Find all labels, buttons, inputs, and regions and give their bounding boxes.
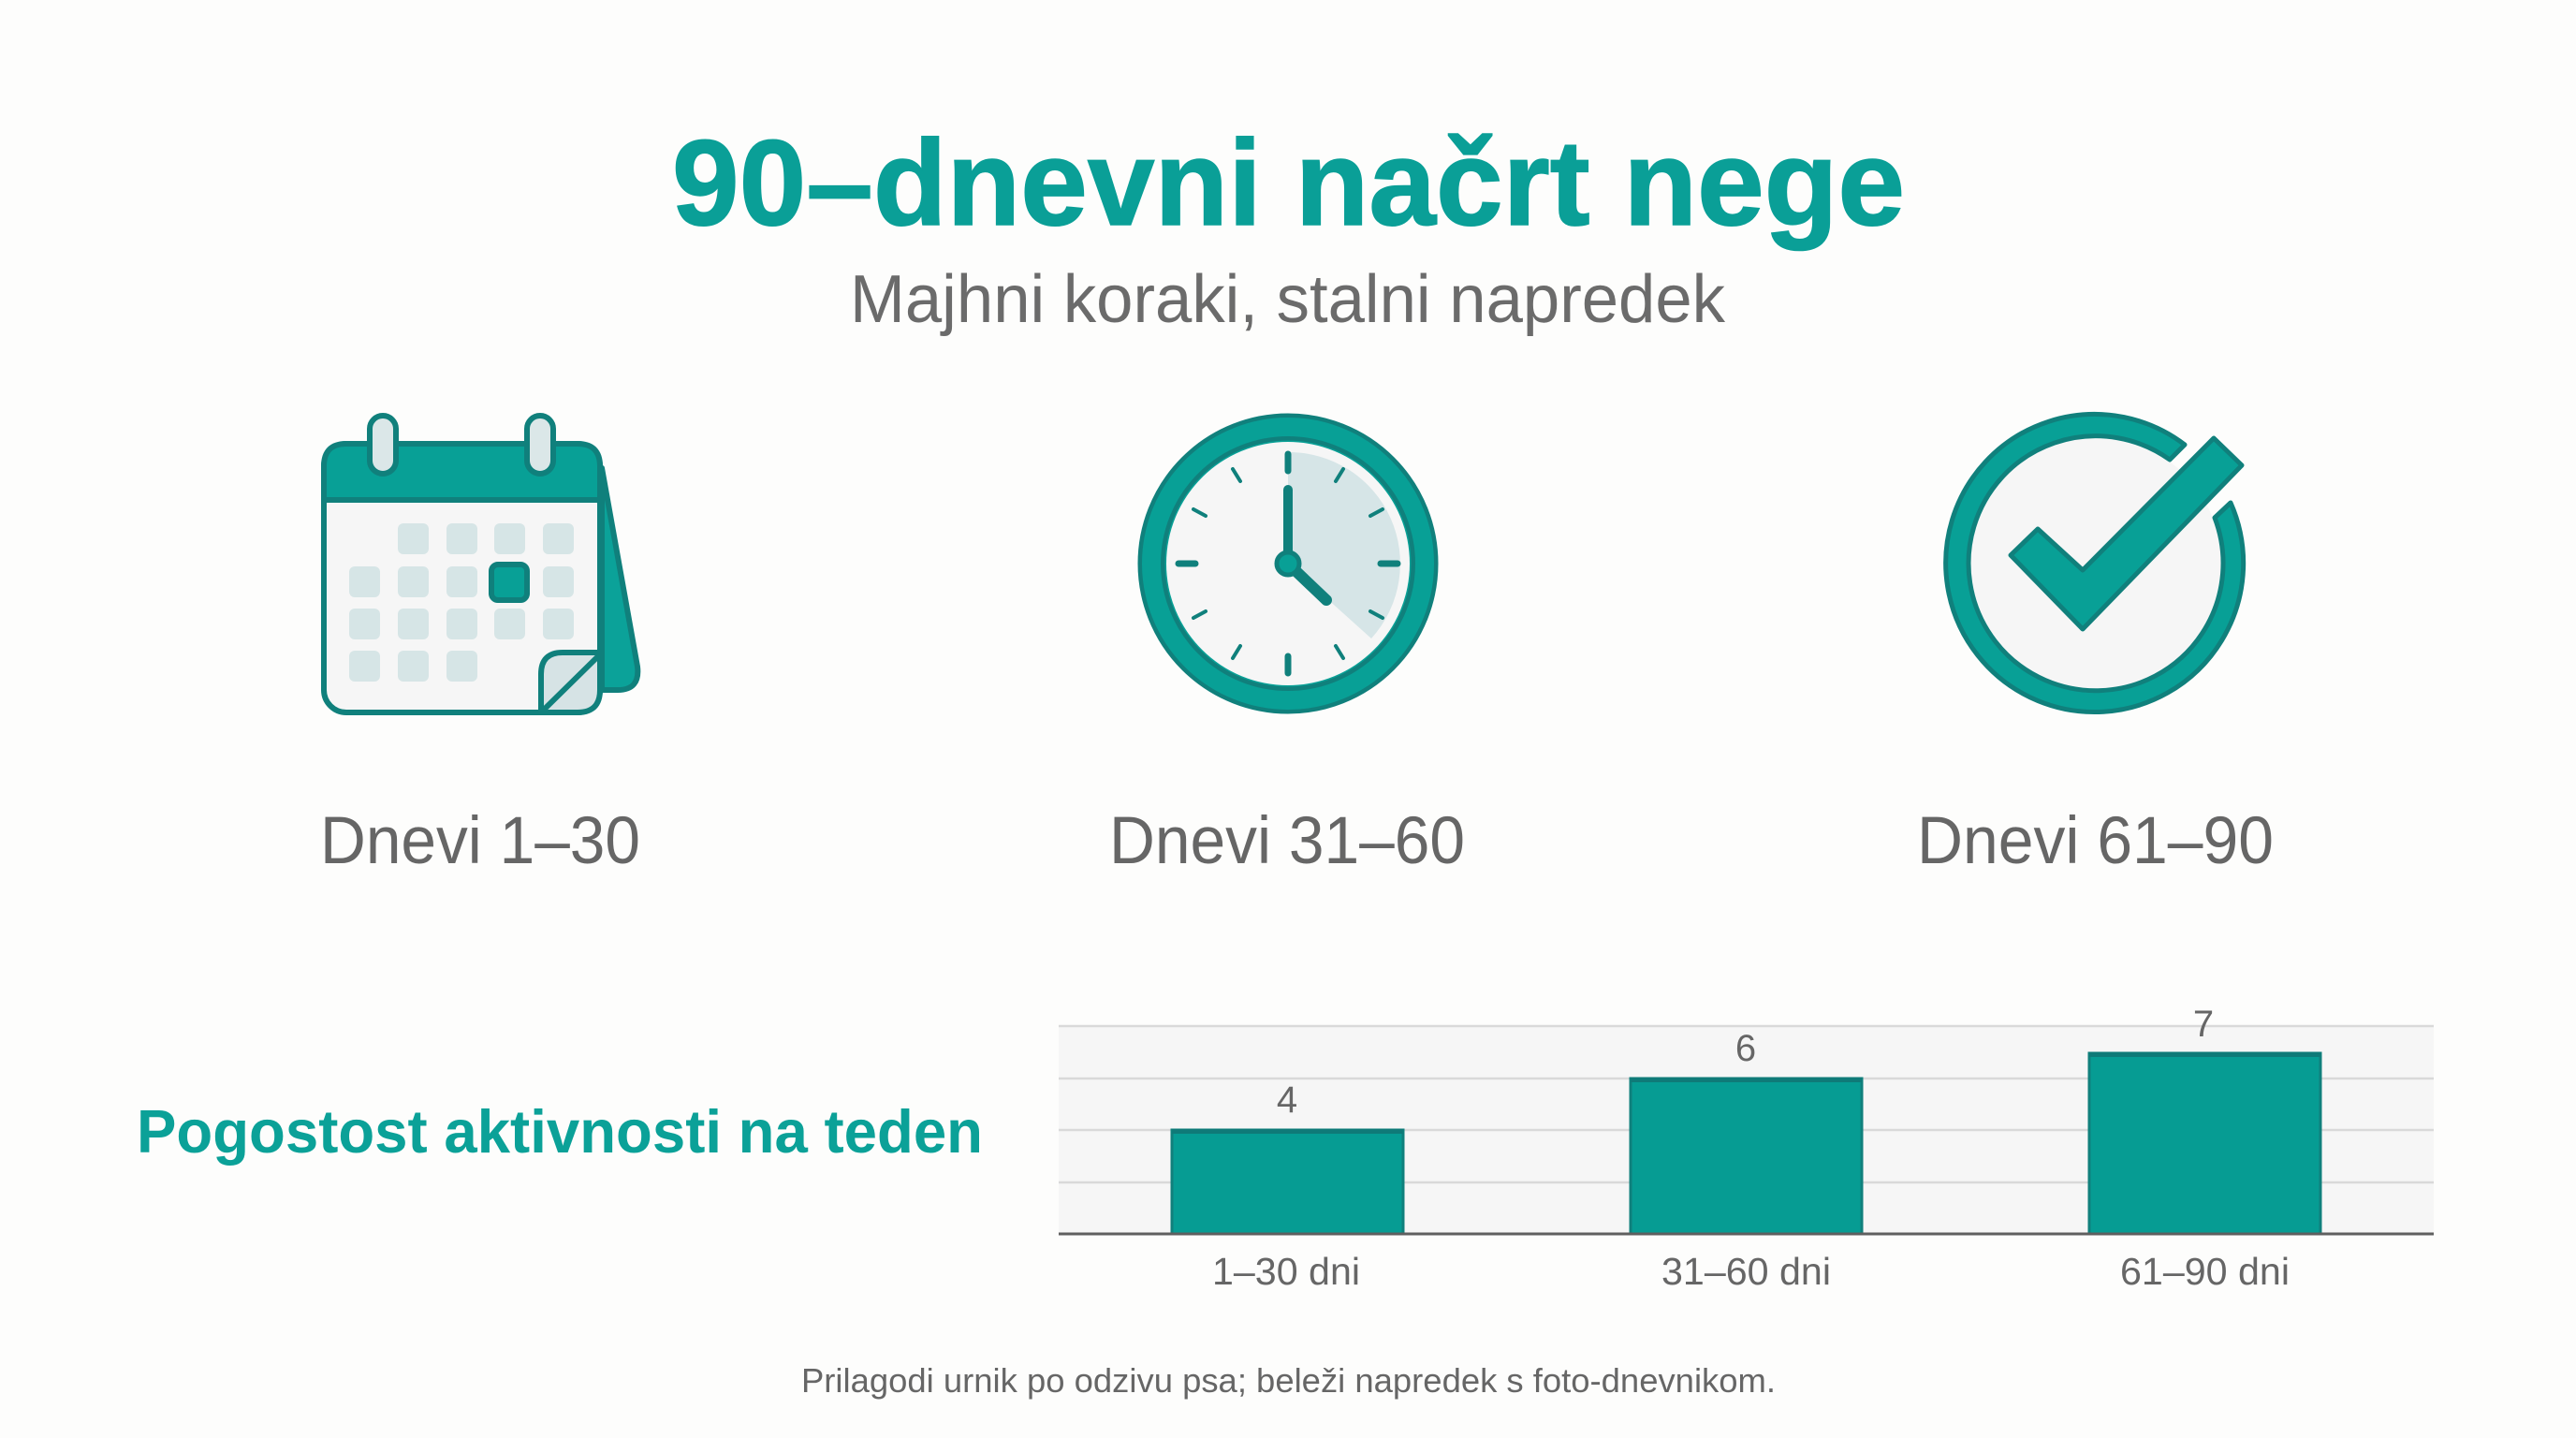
bar chart: weekly activity frequency xyxy=(1059,1004,2434,1293)
label: days 1-30: Dnevi 1–30 xyxy=(320,804,640,878)
bar: 31-60 days: 31–60 dni xyxy=(1661,1250,1831,1293)
icon: clock xyxy=(1151,427,1425,700)
bar: 1-30 days xyxy=(1172,1079,1403,1293)
icon: check mark xyxy=(1946,414,2244,712)
footnote: Prilagodi urnik po odzivu psa; beleži napredek s foto-dnevnikom. xyxy=(801,1361,1776,1400)
title: 90–dnevni načrt nege xyxy=(672,114,1905,251)
label: days 31-60: Dnevi 31–60 xyxy=(1109,804,1465,878)
bar: 1-30 days: 1–30 dni xyxy=(1212,1250,1360,1293)
bar: 1-30 days: 4 xyxy=(1277,1079,1297,1121)
icon: calendar xyxy=(324,416,637,712)
bar: 31-60 days xyxy=(1631,1028,1862,1293)
bar: 61-90 days: 61–90 dni xyxy=(2120,1250,2290,1293)
chart heading: Pogostost aktivnosti na teden xyxy=(137,1097,983,1166)
subtitle: Majhni koraki, stalni napredek xyxy=(850,262,1726,337)
bar: 61-90 days xyxy=(2089,1004,2320,1293)
label: days 61-90: Dnevi 61–90 xyxy=(1917,804,2274,878)
bar: 31-60 days: 6 xyxy=(1735,1028,1756,1069)
bar: 61-90 days: 7 xyxy=(2193,1004,2214,1045)
